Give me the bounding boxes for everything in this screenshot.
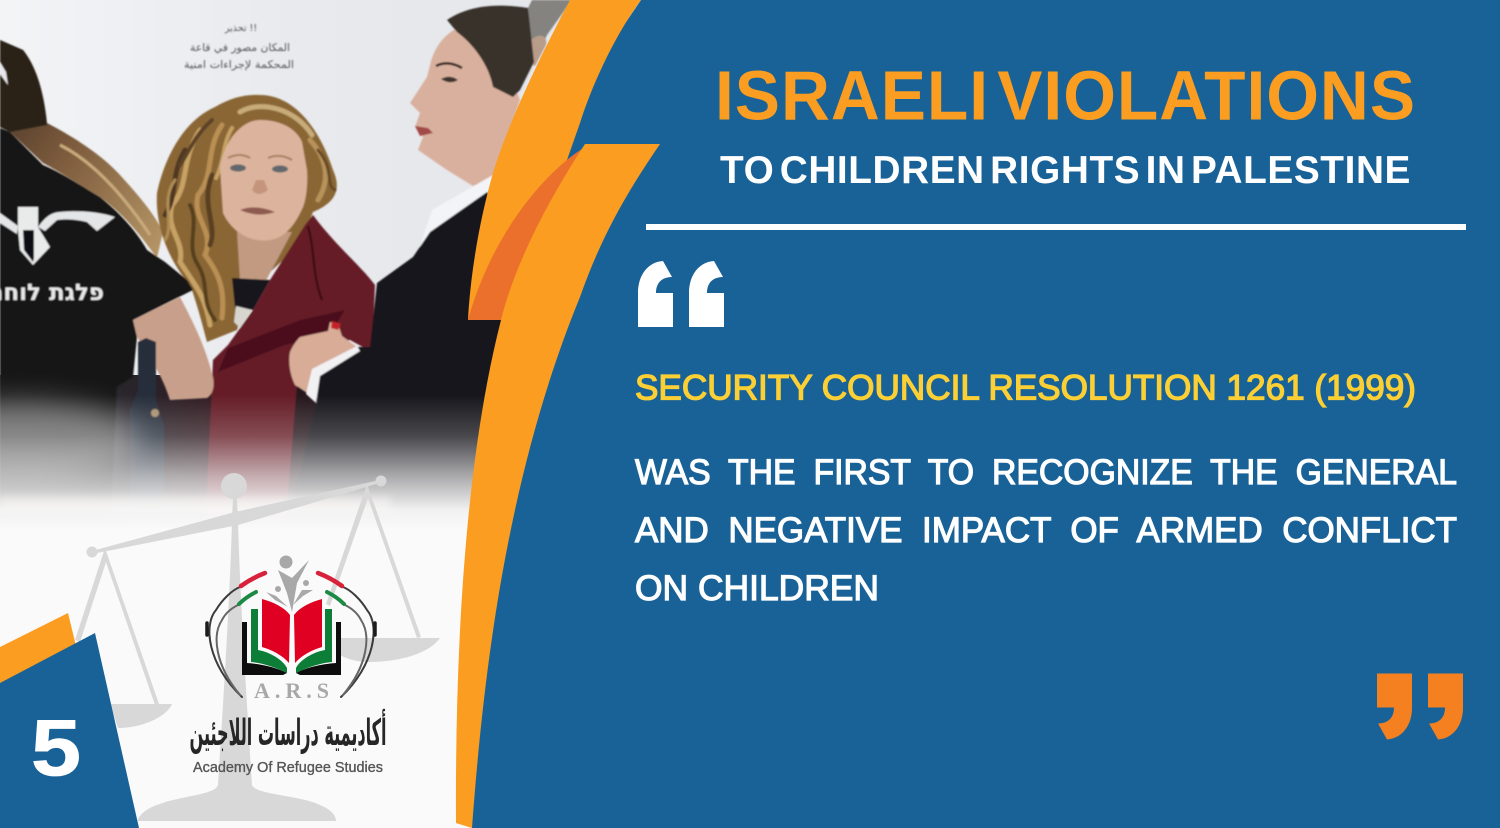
body text xyxy=(635,452,1457,608)
officer: background figure xyxy=(528,0,572,66)
logo: wreath arcs xyxy=(207,573,375,697)
wall notice in Arabic xyxy=(184,23,294,71)
upper orange swoosh xyxy=(468,0,641,320)
dark orange swoosh xyxy=(468,146,587,320)
number tab: blue xyxy=(0,633,139,828)
guard: baton xyxy=(130,338,164,530)
body text: WAS THE FIRST TO RECOGNIZE THE GENERAL xyxy=(635,452,1457,492)
closing quotation mark xyxy=(1377,674,1463,740)
girl: red coat xyxy=(205,215,375,530)
wall notice in Arabic: المكان مصور في قاعة xyxy=(190,42,290,54)
opening quotation mark xyxy=(638,261,724,327)
subtitle: TO CHILDREN RIGHTS IN PALESTINE xyxy=(720,149,1411,192)
officer: black jacket xyxy=(285,192,530,530)
logo: Arabic calligraphy: أكاديمية دراسات اللاجئين xyxy=(190,709,386,754)
bench highlight band xyxy=(0,497,390,513)
title divider xyxy=(646,224,1466,230)
girl: curly hair xyxy=(157,95,337,342)
guard: bare arm xyxy=(133,297,214,400)
logo: open book xyxy=(242,599,341,675)
wall notice in Arabic: المحكمة لإجراءات امنية xyxy=(184,59,294,71)
logo: A.R.S initials: A.R.S xyxy=(254,678,329,703)
photo fade to white xyxy=(0,395,580,530)
number tab: blue: 5 xyxy=(31,703,81,792)
blue main panel xyxy=(470,0,1500,828)
officer: face and neck xyxy=(410,28,520,186)
guard: shirt emblem xyxy=(0,207,115,265)
girl: face xyxy=(220,120,307,240)
resolution heading: SECURITY COUNCIL RESOLUTION 1261 (1999) xyxy=(635,368,1416,408)
logo: English name: Academy Of Refugee Studies xyxy=(193,760,383,776)
body text: ON CHILDREN xyxy=(635,568,879,608)
lower orange swoosh xyxy=(456,144,660,828)
guard: long hair xyxy=(0,40,163,258)
scales of justice watermark xyxy=(75,473,440,821)
body text: AND NEGATIVE IMPACT OF ARMED CONFLICT xyxy=(635,510,1457,550)
number tab: orange accent xyxy=(0,613,76,690)
officer: hand and cuff xyxy=(289,322,357,393)
logo: Academy of Refugee Studies xyxy=(190,556,386,776)
officer: white collar xyxy=(418,175,493,252)
officer: hair xyxy=(447,6,534,97)
photo: courtroom scene xyxy=(0,0,580,828)
wall notice in Arabic: تحذير !! xyxy=(224,23,257,34)
guard: black shirt xyxy=(0,128,193,530)
title: ISRAELI VIOLATIONS xyxy=(715,56,1416,134)
logo: figures above book xyxy=(266,556,313,612)
girl: neck and undershirt xyxy=(237,232,292,288)
